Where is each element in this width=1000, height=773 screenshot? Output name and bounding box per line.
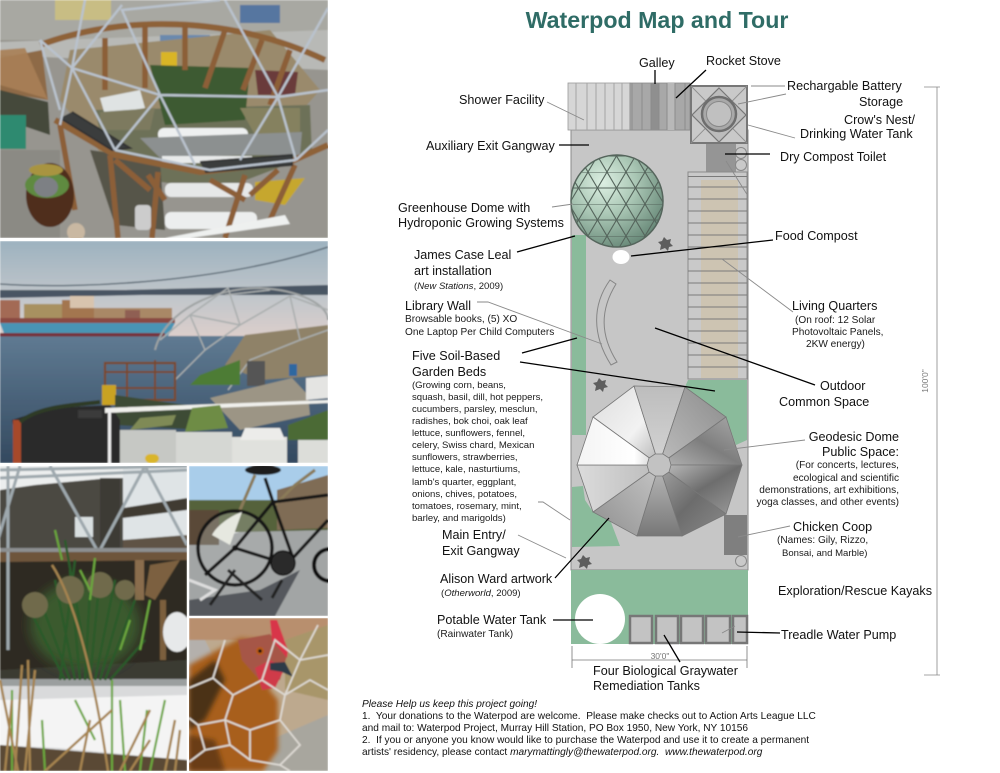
label: five soil-based garden beds: barley, and marigolds) — [412, 513, 506, 524]
chicken wire — [189, 625, 328, 771]
geodesic dome public space — [577, 386, 742, 536]
label: graywater tanks — [593, 664, 738, 693]
rear garden bed — [571, 570, 748, 644]
label: james case leal: (New Stations, 2009) — [414, 281, 503, 292]
label: living quarters: 2KW energy) — [806, 339, 865, 350]
label: james case leal — [414, 248, 511, 292]
label: main entry: Main Entry/ — [442, 528, 506, 542]
label: five soil-based garden beds: Five Soil-Based — [412, 349, 500, 363]
label: chicken coop: (Names: Gily, Rizzo, — [777, 535, 868, 546]
footer appeal text — [362, 699, 816, 758]
galley roof — [630, 83, 690, 130]
label: crow's nest — [800, 113, 915, 141]
label: geodesic dome public space: yoga classes, and other events) — [756, 497, 899, 508]
label: potable water tank: Potable Water Tank — [437, 613, 547, 627]
graywater tanks — [630, 616, 747, 643]
label: chicken coop — [777, 520, 872, 559]
dome struts — [40, 0, 328, 170]
library wall — [597, 280, 617, 365]
chicken coop — [724, 515, 747, 566]
label: five soil-based garden beds: (Growing corn, beans, — [412, 380, 506, 391]
label: geodesic dome public space: demonstrations, art exhibitions, — [759, 485, 899, 496]
label: greenhouse dome — [398, 201, 564, 230]
label: alison ward artwork — [440, 572, 553, 599]
photo: greenhouse dome interior from above — [0, 0, 328, 241]
label: geodesic dome public space — [756, 430, 899, 508]
label: five soil-based garden beds: onions, chives, potatoes, — [412, 489, 517, 500]
label: alison ward artwork: (Otherworld, 2009) — [441, 588, 521, 599]
food compost — [612, 250, 630, 264]
potable water tank — [575, 594, 625, 644]
label: crow's nest: Crow's Nest/ — [844, 113, 915, 127]
photo: bicycle generator — [189, 466, 328, 616]
dry compost toilet — [706, 144, 746, 172]
label: treadle water pump: Treadle Water Pump — [781, 628, 896, 642]
leader lines — [477, 70, 815, 662]
title: Waterpod Map and Tour — [526, 7, 788, 33]
label: main entry — [442, 528, 520, 558]
label: library wall: Library Wall — [405, 299, 471, 313]
label: living quarters: Photovoltaic Panels, — [792, 327, 883, 338]
sculptures — [577, 237, 673, 569]
label: shower facility: Shower Facility — [459, 93, 545, 107]
deck — [571, 130, 748, 570]
label: library wall — [405, 299, 554, 338]
footer appeal text: Please Help us keep this project going! — [362, 699, 537, 710]
dome — [155, 288, 328, 350]
tub — [0, 685, 187, 761]
label: greenhouse dome: Greenhouse Dome with — [398, 201, 530, 215]
greenhouse dome — [570, 154, 664, 248]
label: five soil-based garden beds: tomatoes, rosemary, mint, — [412, 501, 522, 512]
label: library wall: Browsable books, (5) XO — [405, 314, 517, 325]
label: kayaks: Exploration/Rescue Kayaks — [778, 584, 932, 598]
crow's nest — [691, 86, 747, 143]
bridge — [0, 247, 328, 286]
label: five soil-based garden beds — [412, 349, 543, 524]
label: geodesic dome public space: Geodesic Dome — [809, 430, 899, 444]
label: five soil-based garden beds: squash, basil, dill, hot peppers, — [412, 392, 543, 403]
beam dimension: 30'0" — [651, 651, 669, 661]
label: geodesic dome public space: (For concerts, lectures, — [796, 460, 899, 471]
photo: reeds in graywater tank — [0, 466, 191, 771]
footer appeal text: artists' residency, please contact marymattingly@thewaterpod.org. www.thewaterpod.org — [362, 747, 763, 758]
label: crow's nest: Drinking Water Tank — [800, 127, 913, 141]
photo: harbor with container ship, bridge and dome — [0, 241, 328, 463]
length dimension — [920, 87, 940, 675]
label: auxiliary exit gangway: Auxiliary Exit Gangway — [426, 139, 555, 153]
label: rechargable battery storage: Rechargable Battery — [787, 79, 903, 93]
label: outdoor common space: Outdoor — [820, 379, 866, 393]
label: geodesic dome public space: Public Space: — [822, 445, 899, 459]
label: five soil-based garden beds: Garden Beds — [412, 365, 486, 379]
garden bed lower left — [572, 486, 620, 547]
barge site plan — [568, 83, 940, 675]
label: five soil-based garden beds: lettuce, kale, nasturtiums, — [412, 464, 520, 475]
label: rocket stove: Rocket Stove — [706, 54, 781, 68]
label: graywater tanks: Four Biological Graywater — [593, 664, 738, 678]
label: living quarters: Living Quarters — [792, 299, 877, 313]
label: outdoor common space: Common Space — [779, 395, 869, 409]
label: alison ward artwork: Alison Ward artwork — [440, 572, 553, 586]
footer appeal text: 1. Your donations to the Waterpod are welcome. Please make checks out to Action Arts League LLC — [362, 711, 816, 722]
label: chicken coop: Chicken Coop — [793, 520, 872, 534]
living quarters — [688, 172, 747, 379]
label: five soil-based garden beds: cucumbers, parsley, mesclun, — [412, 404, 538, 415]
label: five soil-based garden beds: celery, Swiss chard, Mexican — [412, 440, 534, 451]
label: living quarters: (On roof: 12 Solar — [795, 315, 876, 326]
label: greenhouse dome: Hydroponic Growing Systems — [398, 216, 564, 230]
label: chicken coop: Bonsai, and Marble) — [782, 548, 867, 559]
label: library wall: One Laptop Per Child Computers — [405, 327, 554, 338]
label: dry compost toilet: Dry Compost Toilet — [780, 150, 887, 164]
beam dimension — [572, 646, 747, 668]
planter barrel — [26, 163, 74, 227]
label: five soil-based garden beds: radishes, bok choi, oak leaf — [412, 416, 528, 427]
label: main entry: Exit Gangway — [442, 544, 520, 558]
label: five soil-based garden beds: lettuce, sunflowers, fennel, — [412, 428, 525, 439]
label: rechargable battery storage: Storage — [859, 95, 903, 109]
footer appeal text: 2. If you or anyone you know would like to purchase the Waterpod and use it to create a permanent — [362, 735, 809, 746]
label: outdoor common space — [779, 379, 869, 409]
label: graywater tanks: Remediation Tanks — [593, 679, 700, 693]
reeds — [30, 540, 145, 680]
label: james case leal: James Case Leal — [414, 248, 511, 262]
shower facility roof — [568, 83, 630, 130]
label: rechargable battery storage — [787, 79, 903, 109]
deck — [210, 378, 310, 430]
IBC planters — [120, 430, 176, 463]
label: potable water tank: (Rainwater Tank) — [437, 629, 513, 640]
label: living quarters — [792, 299, 883, 350]
label: galley: Galley — [639, 56, 675, 70]
label: geodesic dome public space: ecological and scientific — [793, 473, 899, 484]
wooden frame — [40, 24, 328, 172]
length dimension: 100'0" — [920, 369, 930, 393]
label: james case leal: art installation — [414, 264, 492, 278]
photo: chicken behind wire — [189, 618, 328, 771]
ship — [0, 323, 175, 336]
footer appeal text: and mail to: Waterpod Project, Murray Hill Station, PO Box 1950, New York, NY 10156 — [362, 723, 748, 734]
garden bed right — [685, 380, 747, 445]
label: five soil-based garden beds: sunflowers, strawberries, — [412, 452, 518, 463]
garden bed left strip — [572, 235, 586, 435]
label: potable water tank — [437, 613, 547, 640]
label: five soil-based garden beds: lamb's quarter, eggplant, — [412, 477, 516, 488]
label: food compost: Food Compost — [775, 229, 858, 243]
